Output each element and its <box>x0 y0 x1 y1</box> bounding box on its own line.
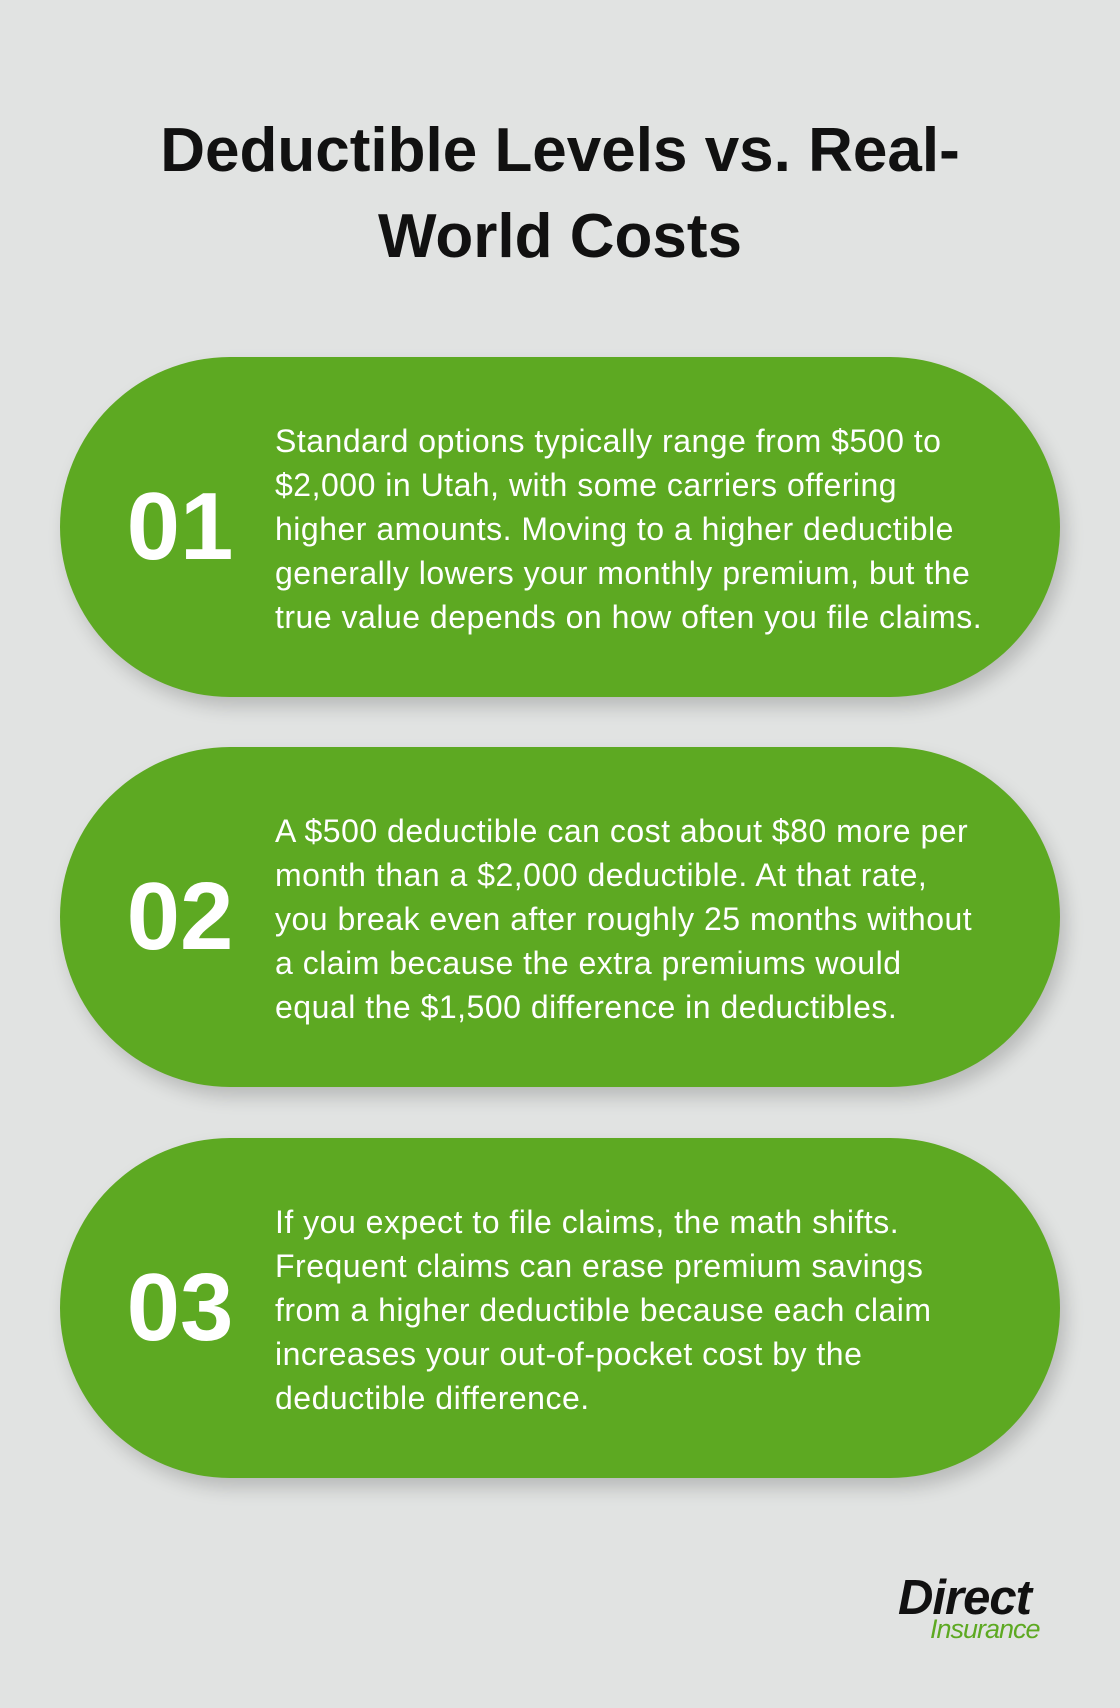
text 03 <box>275 1204 932 1416</box>
number 01: 01 <box>127 473 233 580</box>
text 01 <box>275 423 982 635</box>
number 02: 02 <box>127 863 233 970</box>
text 03: from a higher deductible because each claim <box>275 1292 932 1328</box>
text 02 <box>275 813 972 1025</box>
text 03: increases your out-of-pocket cost by the <box>275 1336 862 1372</box>
text 03: If you expect to file claims, the math shifts. <box>275 1204 899 1240</box>
logo <box>898 1571 1040 1644</box>
text 02: month than a $2,000 deductible. At that rate, <box>275 857 927 893</box>
title <box>160 116 960 271</box>
panel: 03 <box>60 1138 1060 1478</box>
text 03: Frequent claims can erase premium savings <box>275 1248 923 1284</box>
text 02: A $500 deductible can cost about $80 more per <box>275 813 968 849</box>
title: World Costs <box>378 202 742 271</box>
text 01: higher amounts. Moving to a higher deductible <box>275 511 954 547</box>
text 02: equal the $1,500 difference in deductibles. <box>275 989 897 1025</box>
number 03: 03 <box>127 1254 233 1361</box>
panel: 02 <box>60 747 1060 1087</box>
text 02: a claim because the extra premiums would <box>275 945 902 981</box>
panel: 01 <box>60 357 1060 697</box>
title: Deductible Levels vs. Real- <box>160 116 960 185</box>
text 01: true value depends on how often you file claims. <box>275 599 982 635</box>
text 01: $2,000 in Utah, with some carriers offering <box>275 467 897 503</box>
text 02: you break even after roughly 25 months without <box>275 901 972 937</box>
logo: Insurance <box>930 1614 1040 1644</box>
text 01: Standard options typically range from $500 to <box>275 423 941 459</box>
logo: Direct <box>898 1571 1031 1625</box>
text 03: deductible difference. <box>275 1380 590 1416</box>
text 01: generally lowers your monthly premium, but the <box>275 555 970 591</box>
